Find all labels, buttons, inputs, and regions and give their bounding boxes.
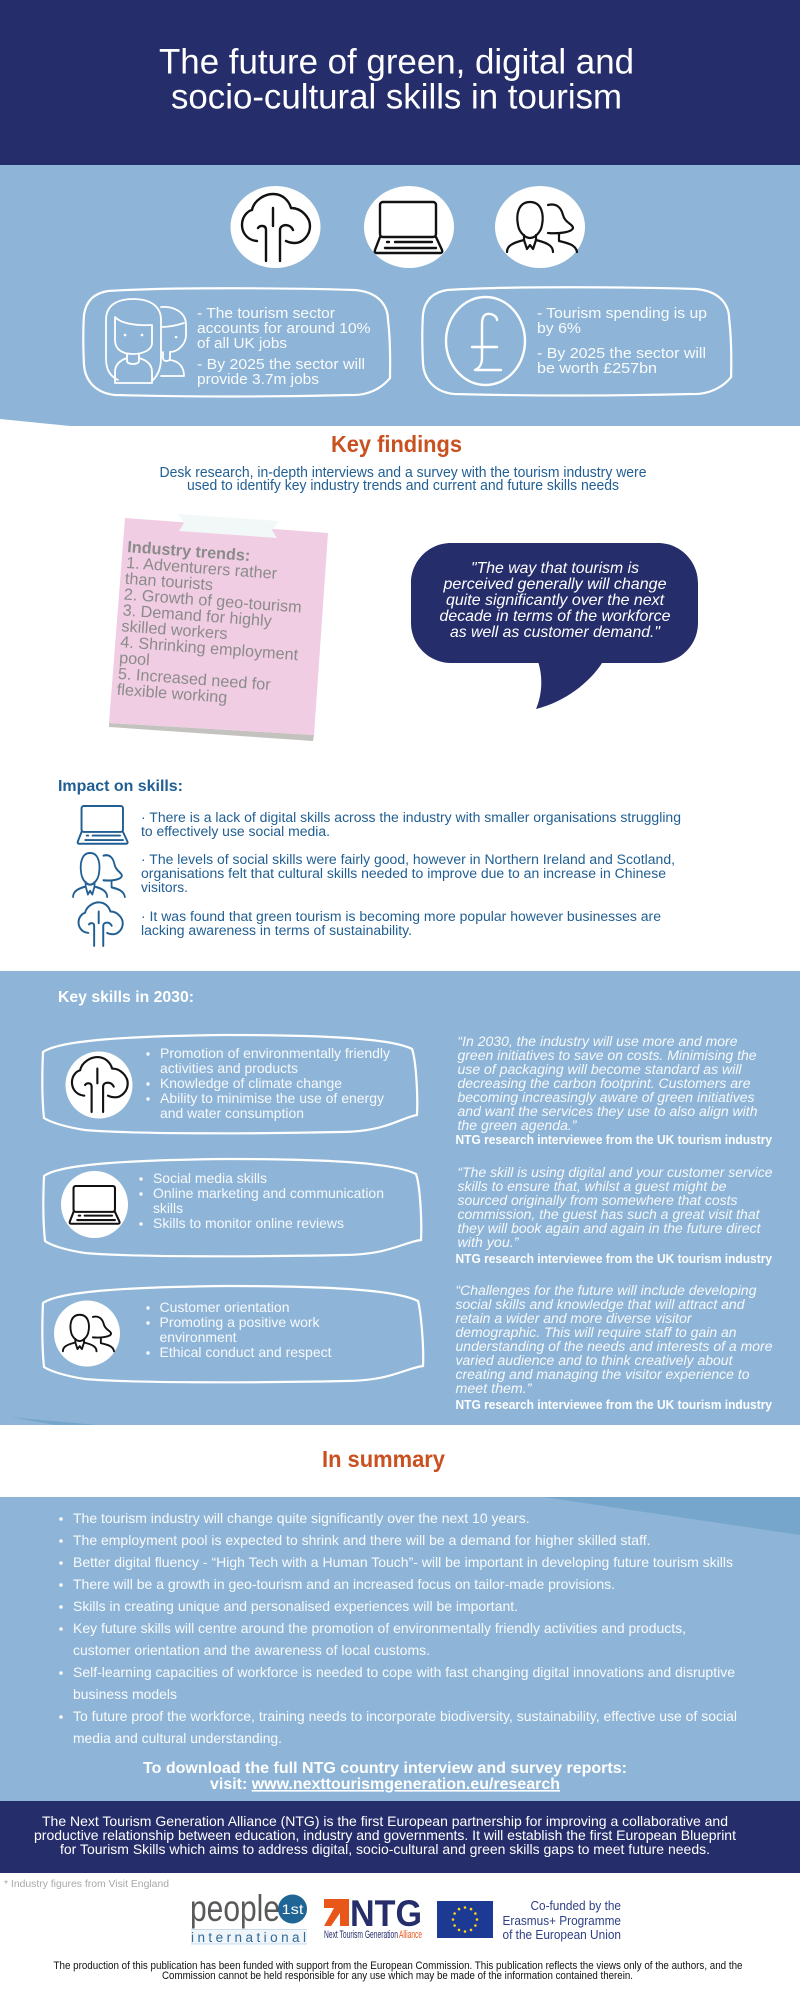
summary bullet list: There will be a growth in geo-tourism and an increased focus on tailor-made provisions.	[73, 1576, 615, 1592]
sticky note text: pool	[119, 649, 150, 669]
quote text: "The way that tourism is	[471, 560, 639, 577]
icon: pound sign in circle	[446, 297, 525, 385]
stat text: jobs: provide 3.7m jobs	[197, 372, 319, 388]
stat text: spending: by 6%	[537, 321, 581, 337]
interviewee quote: green	[456, 1034, 772, 1147]
title	[159, 42, 634, 116]
sticky note text: 4. Shrinking employment	[120, 633, 299, 664]
quote text: perceived generally will change	[442, 576, 667, 593]
interviewee quote: socio-cultural: social skills and knowledge that will attract and	[456, 1297, 745, 1312]
stat text: jobs	[197, 306, 371, 388]
stat text: spending: - Tourism spending is up	[537, 306, 707, 322]
skill box: digital	[43, 1159, 421, 1256]
download call to action: visit: www.nexttourismgeneration.eu/research	[210, 1776, 560, 1793]
green skills list: activities and products	[160, 1060, 298, 1076]
intro text: key findings: used to identify key industry trends and current and future skills needs	[187, 478, 619, 494]
interviewee quote: digital: commission, the guest has such a great visit that	[458, 1207, 761, 1222]
quote text: quite significantly over the next	[446, 592, 665, 609]
summary bullet list: customer orientation and the awareness of local customs.	[73, 1642, 430, 1658]
socio-cultural skills list: environment	[160, 1329, 237, 1345]
interviewee quote: socio-cultural: “Challenges for the future will include developing	[456, 1283, 757, 1298]
interviewee quote: green: becoming increasingly aware of green initiatives	[458, 1090, 755, 1105]
interviewee quote: green: use of packaging will become standard as will	[458, 1062, 743, 1077]
interviewee quote: green: green initiatives to save on costs. Minimising the	[458, 1048, 756, 1063]
panel: tourism statistics	[0, 165, 800, 426]
header banner	[0, 0, 800, 165]
co-funding statement: Co-funded by the	[530, 1899, 621, 1913]
interviewee quote: socio-cultural: NTG research interviewee from the UK tourism industry	[456, 1398, 772, 1412]
impact text: green: lacking awareness in terms of sustainability.	[141, 923, 412, 938]
icon: socio-cultural skills people	[495, 186, 585, 268]
impact text: social: · The levels of social skills were fairly good, however in Northern Ireland and Scotland,	[141, 852, 675, 867]
stat text: spending	[537, 306, 707, 377]
quote text	[440, 560, 671, 641]
panel: NTG alliance statement: The Next Tourism Generation Alliance (NTG) is the first European partnership for improving a collaborative and	[42, 1813, 728, 1829]
summary bullet list: To future proof the workforce, training needs to incorporate biodiversity, sustainability, effective use of social	[73, 1708, 737, 1724]
interviewee quote: green: the green agenda.”	[458, 1118, 577, 1133]
impact text: digital: · There is a lack of digital skills across the industry with smaller organisations struggling	[141, 810, 681, 825]
intro text: key findings	[160, 465, 646, 494]
impact text: digital	[141, 810, 681, 839]
socio-cultural skills list: Promoting a positive work	[160, 1314, 320, 1330]
heading: key skills: Key skills in 2030:	[58, 989, 194, 1006]
socio-cultural skills list: Customer orientation	[160, 1299, 290, 1315]
logo: People 1st International: 1st	[282, 1901, 304, 1917]
interviewee quote: socio-cultural: creating and managing the visitor experience to	[456, 1367, 750, 1382]
co-funding statement	[502, 1899, 621, 1942]
disclaimer	[54, 1960, 742, 1982]
digital skills list: Online marketing and communication	[153, 1185, 384, 1201]
summary bullet list: Skills in creating unique and personalised experiences will be important.	[73, 1598, 518, 1614]
interviewee quote: digital: “The skill is using digital and your customer service	[458, 1165, 772, 1180]
quote text: decade in terms of the workforce	[440, 608, 671, 625]
heading: in summary: In summary	[322, 1446, 445, 1472]
impact text: digital: to effectively use social media.	[141, 824, 330, 839]
logo: People 1st International: people	[190, 1888, 280, 1929]
sticky note text: 3. Demand for highly	[122, 601, 273, 630]
sticky note text: 5. Increased need for	[117, 665, 272, 694]
logo: EU flag	[437, 1901, 493, 1938]
stat text: spending: - By 2025 the sector will	[537, 346, 706, 362]
stat box: jobs	[83, 288, 390, 396]
interviewee quote: digital: sourced originally from somewhere that costs	[458, 1193, 738, 1208]
panel: key skills in 2030	[0, 971, 800, 1425]
impact text: social: visitors.	[141, 880, 188, 895]
impact item: digital	[78, 806, 681, 844]
icon: people	[54, 1300, 120, 1366]
heading: impact on skills: Impact on skills:	[58, 778, 183, 795]
interviewee quote: digital: with you.”	[458, 1235, 519, 1250]
green skills list: Promotion of environmentally friendly	[160, 1045, 390, 1061]
logo: People 1st International	[190, 1888, 307, 1945]
interviewee quote: socio-cultural: varied audience and to think creatively about	[456, 1353, 734, 1368]
summary bullet list: Better digital fluency - “High Tech with a Human Touch”- will be important in developing future tourism skills	[73, 1554, 733, 1570]
summary bullet list: Self-learning capacities of workforce is needed to cope with fast changing digital innovations and disruptive	[73, 1664, 735, 1680]
socio-cultural skills list	[146, 1299, 332, 1360]
summary bullet list: The tourism industry will change quite significantly over the next 10 years.	[73, 1510, 530, 1526]
sticky note text	[116, 538, 306, 712]
title: socio-cultural skills in tourism	[171, 78, 622, 116]
panel: summary	[0, 1497, 800, 1801]
impact text: social	[141, 852, 675, 895]
socio-cultural skills list: Ethical conduct and respect	[160, 1344, 332, 1360]
icon: tree	[66, 1052, 132, 1118]
icon: digital skills laptop	[364, 186, 454, 268]
sticky note text: flexible working	[116, 681, 228, 707]
stat text: jobs: of all UK jobs	[197, 336, 287, 352]
impact text: green: · It was found that green tourism is becoming more popular however businesses are	[141, 909, 661, 924]
disclaimer: Commission cannot be held responsible for any use which may be made of the information contained therein.	[162, 1970, 633, 1982]
logo: NTG Alliance: Next Tourism Generation	[324, 1929, 398, 1941]
sticky note text: skilled workers	[121, 617, 228, 643]
icon: green skills tree	[230, 186, 320, 268]
download call to action: To download the full NTG country interview and survey reports:	[143, 1760, 627, 1777]
panel: NTG alliance statement	[0, 1801, 800, 1873]
speech bubble quote	[411, 543, 698, 709]
interviewee quote: socio-cultural: understanding of the needs and interests of a more	[456, 1339, 772, 1354]
impact text: green	[141, 909, 661, 938]
quote text: as well as customer demand."	[450, 624, 661, 641]
digital skills list: Skills to monitor online reviews	[153, 1215, 344, 1231]
summary bullet list: business models	[73, 1686, 177, 1702]
logo: NTG Alliance: Alliance	[399, 1929, 422, 1941]
sticky note text: 2. Growth of geo-tourism	[123, 586, 302, 617]
interviewee quote: green: and want the services they use to also align with	[458, 1104, 758, 1119]
interviewee quote: green: “In 2030, the industry will use more and more	[458, 1034, 738, 1049]
digital skills list: skills	[153, 1200, 183, 1216]
interviewee quote: socio-cultural	[456, 1283, 772, 1412]
icon: laptop	[61, 1171, 128, 1238]
summary bullet list: media and cultural understanding.	[73, 1730, 282, 1746]
stat text: spending: be worth £257bn	[537, 361, 657, 377]
source note: * Industry figures from Visit England	[4, 1878, 169, 1890]
stat text: jobs: - The tourism sector	[197, 306, 335, 322]
green skills list	[146, 1045, 390, 1121]
co-funding statement: of the European Union	[502, 1928, 621, 1942]
summary bullet list: Key future skills will centre around the promotion of environmentally friendly activities and products,	[73, 1620, 686, 1636]
interviewee quote: digital	[456, 1165, 772, 1266]
sticky note text: Industry trends:	[127, 538, 251, 565]
digital skills list: Social media skills	[153, 1170, 267, 1186]
interviewee quote: digital: they will book again and again in the future direct	[458, 1221, 762, 1236]
green skills list: Ability to minimise the use of energy	[160, 1090, 384, 1106]
stat text: jobs: - By 2025 the sector will	[197, 357, 365, 373]
sticky note: industry trends	[109, 514, 328, 741]
panel: NTG alliance statement: for Tourism Skills which aims to address digital, socio-cultural and green skills gaps to meet future needs.	[60, 1841, 710, 1857]
title: The future of green, digital and	[159, 42, 634, 82]
sticky note text: than tourists	[124, 570, 214, 594]
sticky note text: 1. Adventurers rather	[126, 554, 278, 583]
stat box: spending	[422, 287, 731, 396]
heading: key findings: Key findings	[331, 431, 462, 457]
interviewee quote: socio-cultural: meet them.”	[456, 1381, 532, 1396]
summary bullet list	[59, 1510, 737, 1746]
skill box: socio-cultural	[42, 1286, 423, 1382]
interviewee quote: digital: NTG research interviewee from the UK tourism industry	[456, 1252, 772, 1266]
impact text: social: organisations felt that cultural skills needed to improve due to an increase in Chinese	[141, 866, 666, 881]
stat text: jobs: accounts for around 10%	[197, 321, 371, 337]
impact item: green	[79, 902, 661, 946]
interviewee quote: socio-cultural: demographic. This will require staff to gain an	[456, 1325, 736, 1340]
interviewee quote: green: NTG research interviewee from the UK tourism industry	[456, 1133, 772, 1147]
skill box: green	[42, 1035, 417, 1133]
green skills list: Knowledge of climate change	[160, 1075, 342, 1091]
impact item: social	[73, 852, 675, 897]
co-funding statement: Erasmus+ Programme	[502, 1914, 621, 1928]
interviewee quote: digital: skills to ensure that, whilst a guest might be	[458, 1179, 726, 1194]
logo: NTG Alliance: NTG	[350, 1893, 422, 1934]
logo: People 1st International: international	[191, 1930, 306, 1945]
interviewee quote: green: decreasing the carbon footprint. Customers are	[458, 1076, 750, 1091]
interviewee quote: socio-cultural: retain a wider and more diverse visitor	[456, 1311, 692, 1326]
logo: NTG Alliance	[324, 1893, 422, 1941]
download call to action	[143, 1760, 627, 1793]
digital skills list	[139, 1170, 384, 1231]
icon: two people outline	[106, 299, 186, 383]
panel: NTG alliance statement: productive relationship between education, industry and governments. It will establish the first European Blueprint	[34, 1827, 736, 1843]
summary bullet list: The employment pool is expected to shrink and there will be a demand for higher skilled staff.	[73, 1532, 650, 1548]
intro text: key findings: Desk research, in-depth interviews and a survey with the tourism industry were	[160, 465, 646, 481]
green skills list: and water consumption	[160, 1105, 304, 1121]
